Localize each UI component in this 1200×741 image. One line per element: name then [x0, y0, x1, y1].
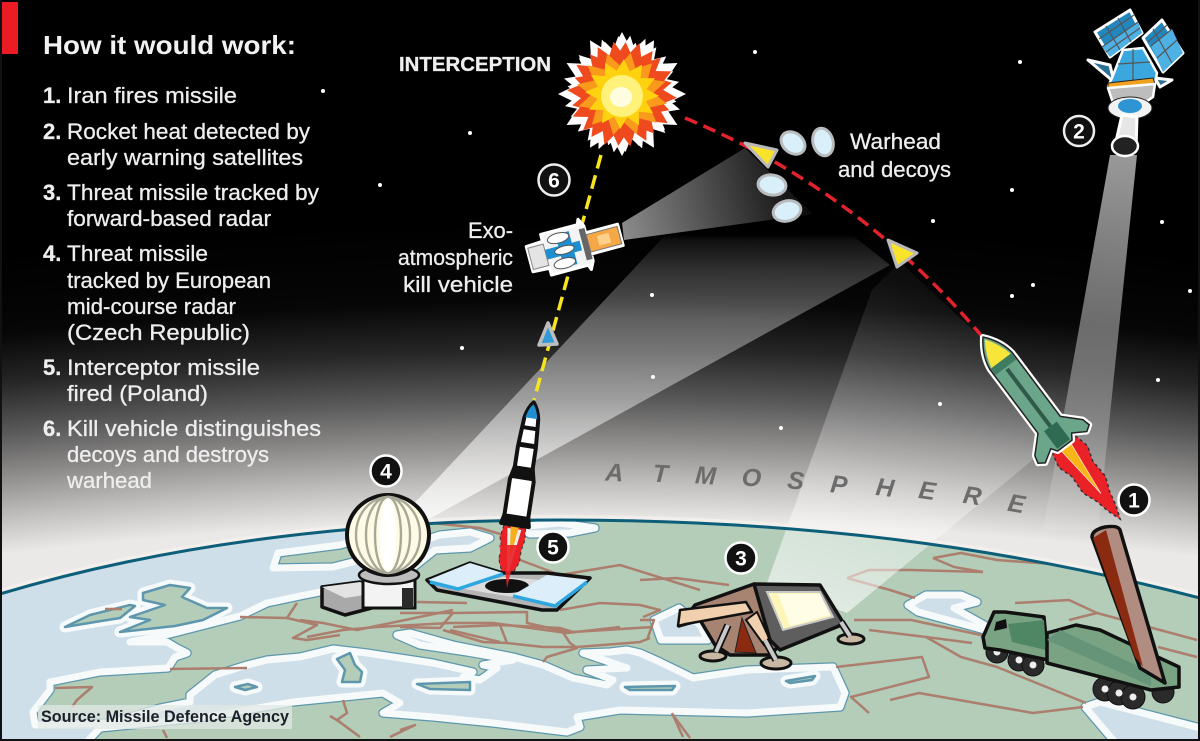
interceptor trajectory [534, 155, 601, 400]
seas [2, 522, 1198, 739]
rocket flame [492, 525, 527, 590]
marker 1: 1 [1128, 490, 1140, 512]
label: exo-atmospheric kill vehicle: kill vehicle [403, 272, 513, 297]
step 6: 6. [43, 416, 61, 441]
threat missile trajectory [685, 118, 985, 340]
atmosphere label: M [694, 461, 718, 491]
step 2: 2. [43, 119, 61, 144]
light beam: forward-based radar [767, 262, 1075, 613]
step 6: decoys and destroys [67, 442, 269, 467]
step 2: Rocket heat detected by [67, 119, 310, 144]
kill vehicle [523, 210, 627, 284]
marker 3: 3 [735, 548, 747, 570]
satellite [1088, 10, 1183, 156]
marker 6 [538, 164, 570, 196]
atmosphere rim [0, 518, 1200, 598]
marker 1 [1118, 484, 1150, 516]
light beam: kill vehicle sensor [622, 148, 813, 240]
tent door [735, 618, 756, 653]
truck cab [983, 612, 1048, 660]
radome [347, 495, 429, 575]
atmosphere label: R [961, 481, 983, 511]
step 3 [43, 180, 319, 231]
atmosphere label: H [874, 473, 897, 503]
solar panel grid [1099, 15, 1177, 63]
radar tower [363, 578, 415, 608]
atmosphere label: A [604, 459, 624, 487]
tent feet [700, 634, 864, 669]
step 6 [43, 416, 321, 493]
launch pad [427, 545, 590, 610]
step 5 [43, 355, 260, 406]
label: exo-atmospheric kill vehicle: atmospheric [398, 245, 513, 270]
step 4: mid-course radar [67, 294, 236, 319]
country borders [55, 523, 1197, 738]
tent legs [716, 622, 850, 660]
marker 4 [370, 456, 402, 486]
step 4: Threat missile [67, 241, 208, 266]
radar dome: European mid-course radar [322, 495, 429, 615]
step 3: 3. [43, 180, 61, 205]
step 3: Threat missile tracked by [67, 180, 319, 205]
number markers [370, 116, 1150, 574]
marker 3 [726, 542, 756, 574]
threat missile [957, 318, 1146, 538]
interceptor warhead marker [539, 323, 557, 345]
radar service box [322, 582, 383, 615]
warheads and decoys [745, 126, 917, 267]
label: interception: INTERCEPTION [399, 54, 551, 76]
atmosphere label: T [652, 460, 671, 489]
truck trailer [1047, 625, 1179, 690]
steps list [43, 83, 321, 493]
label: exo-atmospheric kill vehicle [398, 218, 513, 297]
step 5: 5. [43, 355, 61, 380]
map of Europe and the Middle East [2, 522, 1198, 739]
step 6: Kill vehicle distinguishes [67, 416, 321, 441]
explosion: interception [550, 18, 694, 170]
step 1: Iran fires missile [67, 83, 237, 108]
tent radar panel [754, 584, 844, 650]
step 4 [43, 241, 271, 345]
step 6: warhead [66, 468, 152, 493]
step 4: (Czech Republic) [67, 320, 250, 345]
atmosphere label [604, 459, 1028, 520]
step 5: fired (Poland) [67, 381, 208, 406]
marker 4: 4 [380, 460, 392, 484]
atmosphere label: O [741, 463, 763, 493]
label: warhead and decoys: and decoys [838, 157, 951, 182]
launcher truck [983, 526, 1179, 709]
atmosphere label: P [829, 470, 849, 500]
step 5: Interceptor missile [67, 355, 260, 380]
light beam: early warning satellite [1043, 155, 1137, 530]
atmosphere label: E [1006, 489, 1028, 520]
step 4: 4. [43, 241, 61, 266]
label: warhead and decoys [838, 129, 951, 182]
forward-based radar tent [678, 584, 864, 669]
marker 2: 2 [1073, 120, 1085, 144]
step 2: early warning satellites [67, 145, 303, 170]
title: How it would work: [43, 30, 296, 60]
interceptor rocket [491, 400, 548, 590]
marker 5 [538, 532, 568, 562]
marker 6: 6 [548, 170, 560, 192]
tent awning [678, 602, 752, 626]
red tab [2, 2, 18, 54]
atmosphere label: S [786, 466, 806, 496]
step 4: tracked by European [67, 268, 271, 293]
light beam: European radar [408, 150, 890, 524]
step 3: forward-based radar [67, 206, 271, 231]
label: warhead and decoys: Warhead [850, 129, 941, 154]
stars [321, 50, 1192, 430]
label: exo-atmospheric kill vehicle: Exo- [468, 218, 513, 243]
step 2 [43, 119, 310, 170]
source note: Source: Missile Defence Agency [41, 707, 290, 726]
launcher tube [1092, 526, 1165, 683]
missile flame [1046, 428, 1135, 530]
islands [65, 585, 815, 690]
atmosphere label: E [917, 476, 939, 506]
truck wheels [986, 641, 1174, 709]
marker 5: 5 [547, 536, 559, 560]
step 1: 1. [43, 83, 61, 108]
marker 2 [1064, 116, 1094, 146]
